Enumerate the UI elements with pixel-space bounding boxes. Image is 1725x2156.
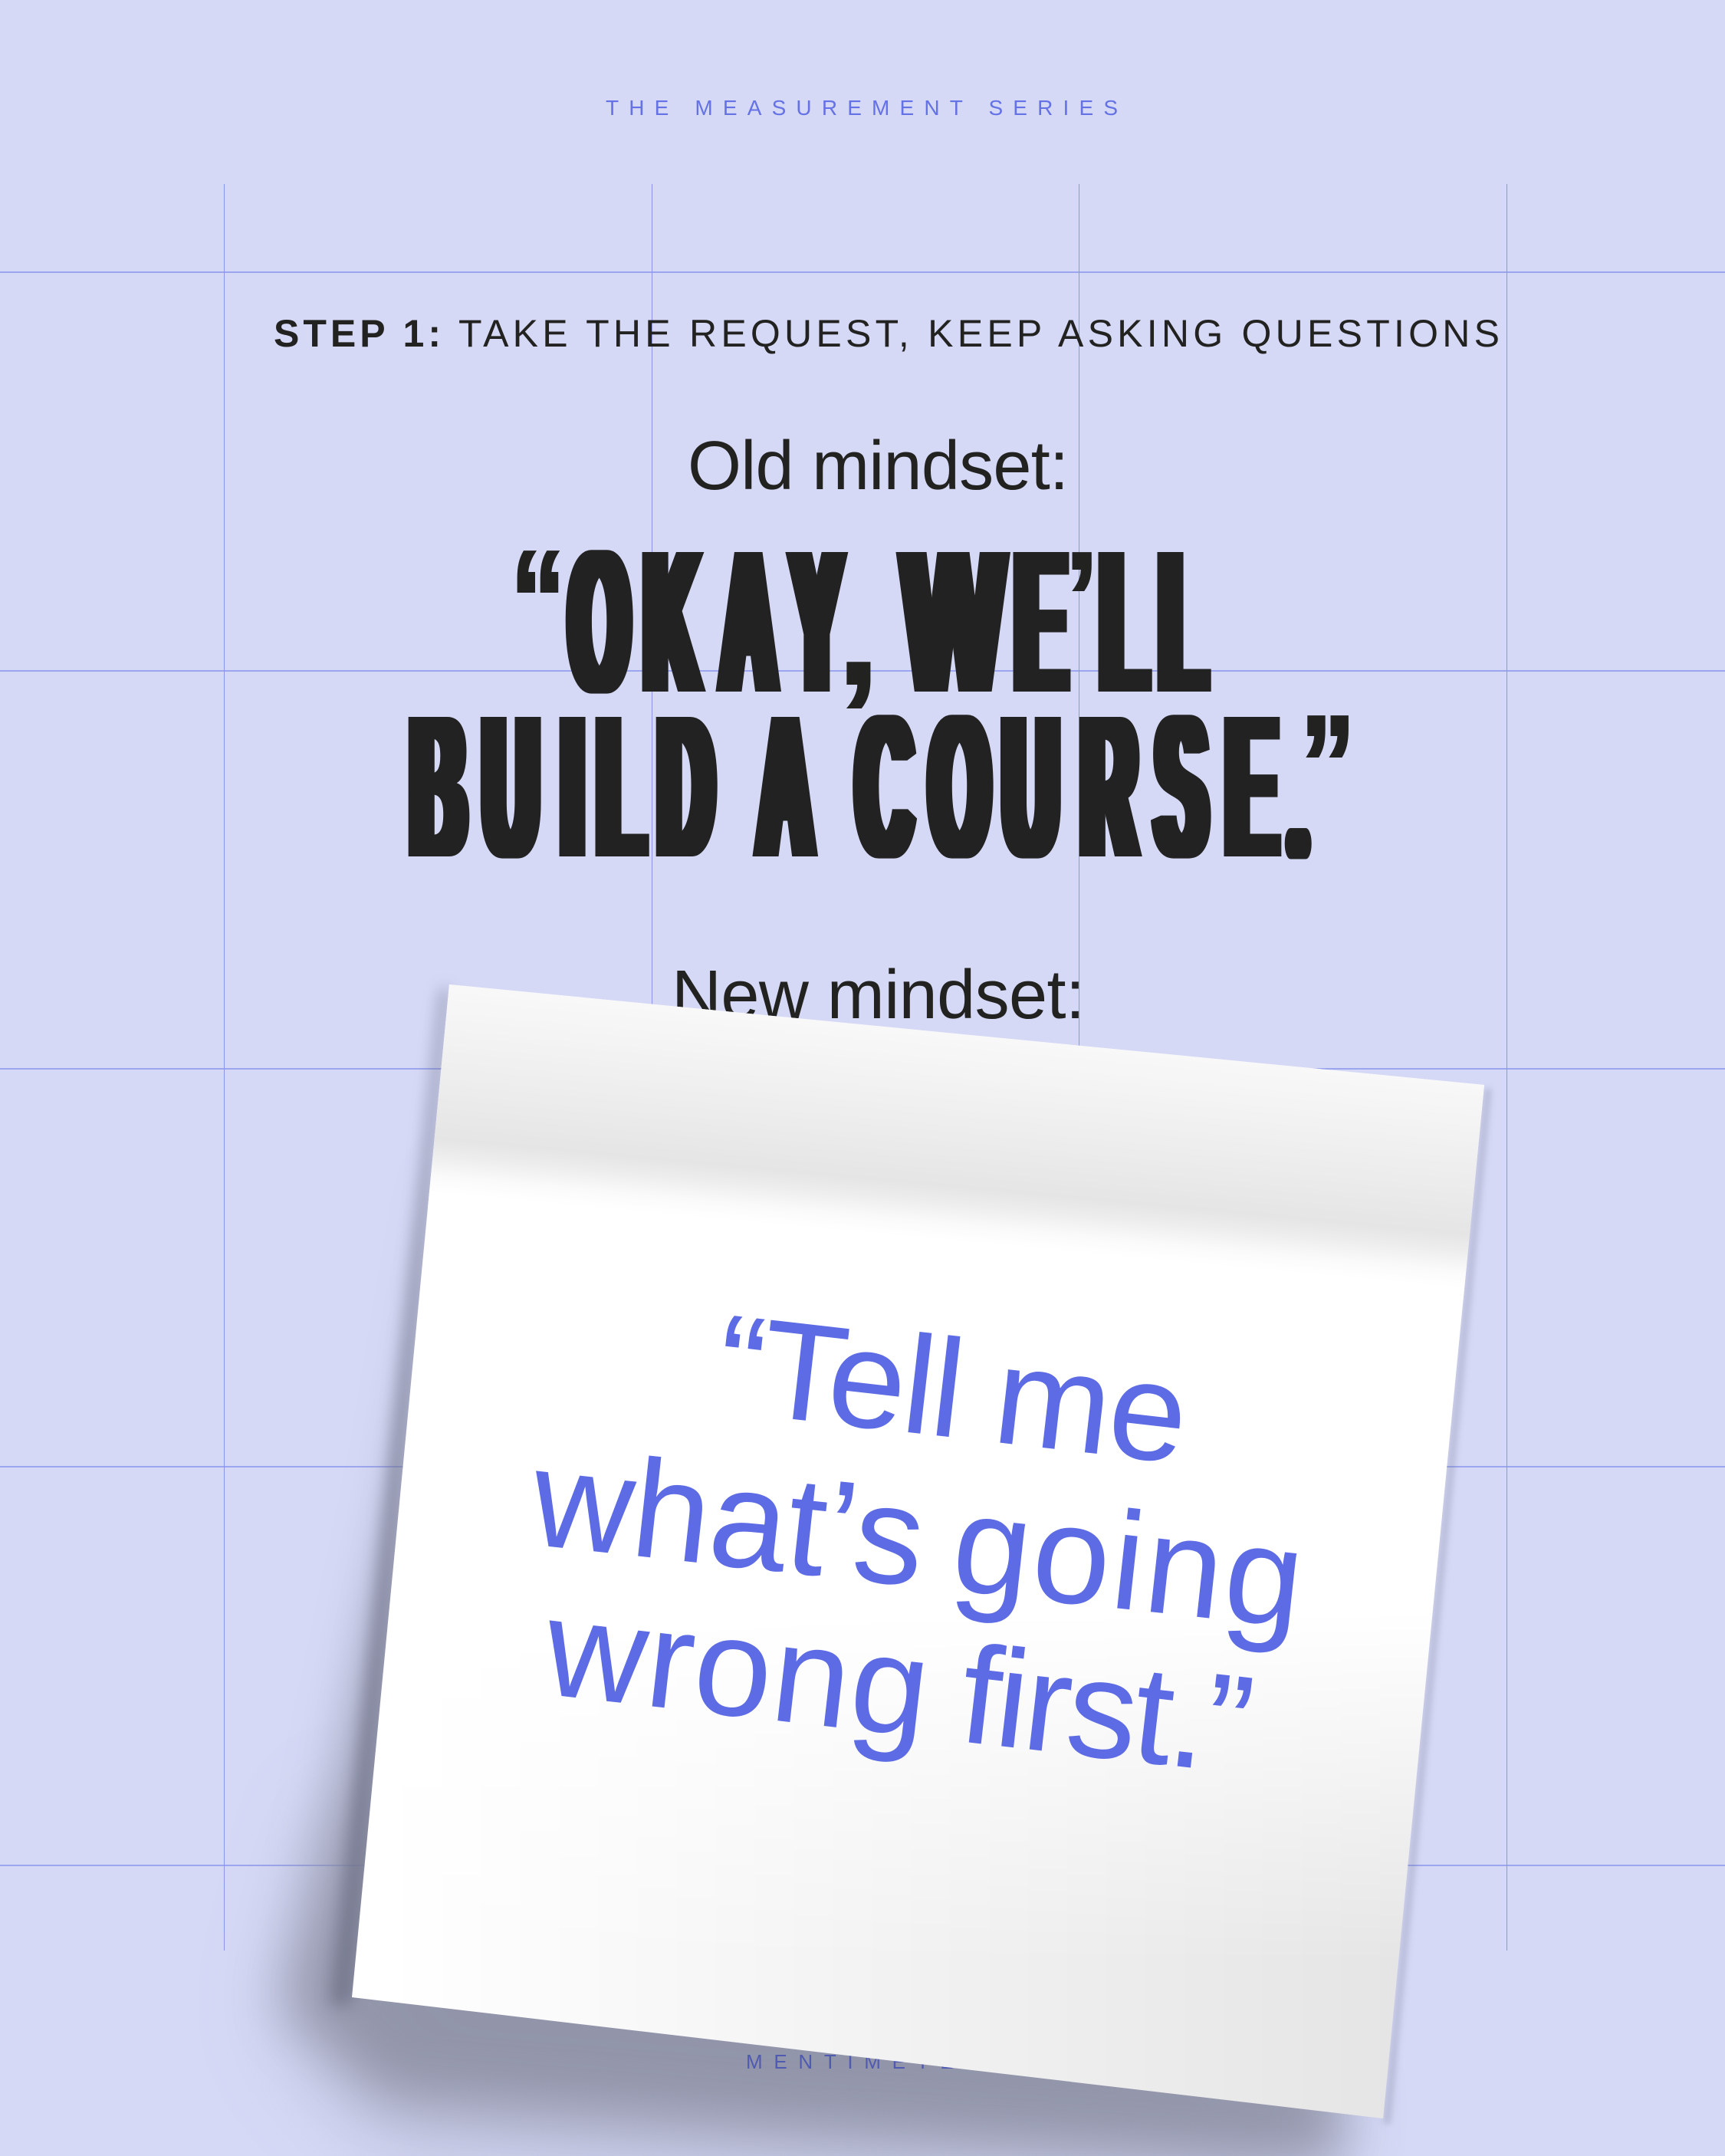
step heading xyxy=(274,312,1500,355)
step description: TAKE THE REQUEST, KEEP ASKING QUESTIONS xyxy=(458,312,1500,355)
note quote: “Tell me xyxy=(710,1284,1194,1493)
note fold shading xyxy=(428,984,1484,1300)
note lower corner shading xyxy=(716,1725,1421,2118)
headline quote: LL xyxy=(1101,508,1206,735)
note quote xyxy=(524,1284,1313,1803)
headline quote: , xyxy=(835,546,882,718)
headline quote: E xyxy=(1016,508,1066,735)
headline quote xyxy=(411,508,1355,900)
headline quote: OKAY xyxy=(570,508,842,735)
sticky note shadow xyxy=(284,989,1492,2156)
footer brand label: MENTIMETER xyxy=(746,2050,979,2073)
headline quote: ” xyxy=(1300,687,1355,842)
headline quote: BUILD A COURSE. xyxy=(411,673,1307,900)
note quote: wrong first.” xyxy=(537,1568,1257,1803)
old mindset label: Old mindset: xyxy=(688,428,1069,504)
note paper xyxy=(352,984,1484,2118)
headline quote: “ xyxy=(511,522,566,677)
new mindset label: New mindset: xyxy=(672,957,1085,1034)
headline quote: ’ xyxy=(1063,523,1101,677)
note quote: what’s going xyxy=(524,1418,1313,1658)
step number: STEP 1: xyxy=(274,312,441,355)
headline quote: W xyxy=(903,508,1003,735)
sticky note xyxy=(352,920,1533,2118)
series label: THE MEASUREMENT SERIES xyxy=(606,96,1118,120)
